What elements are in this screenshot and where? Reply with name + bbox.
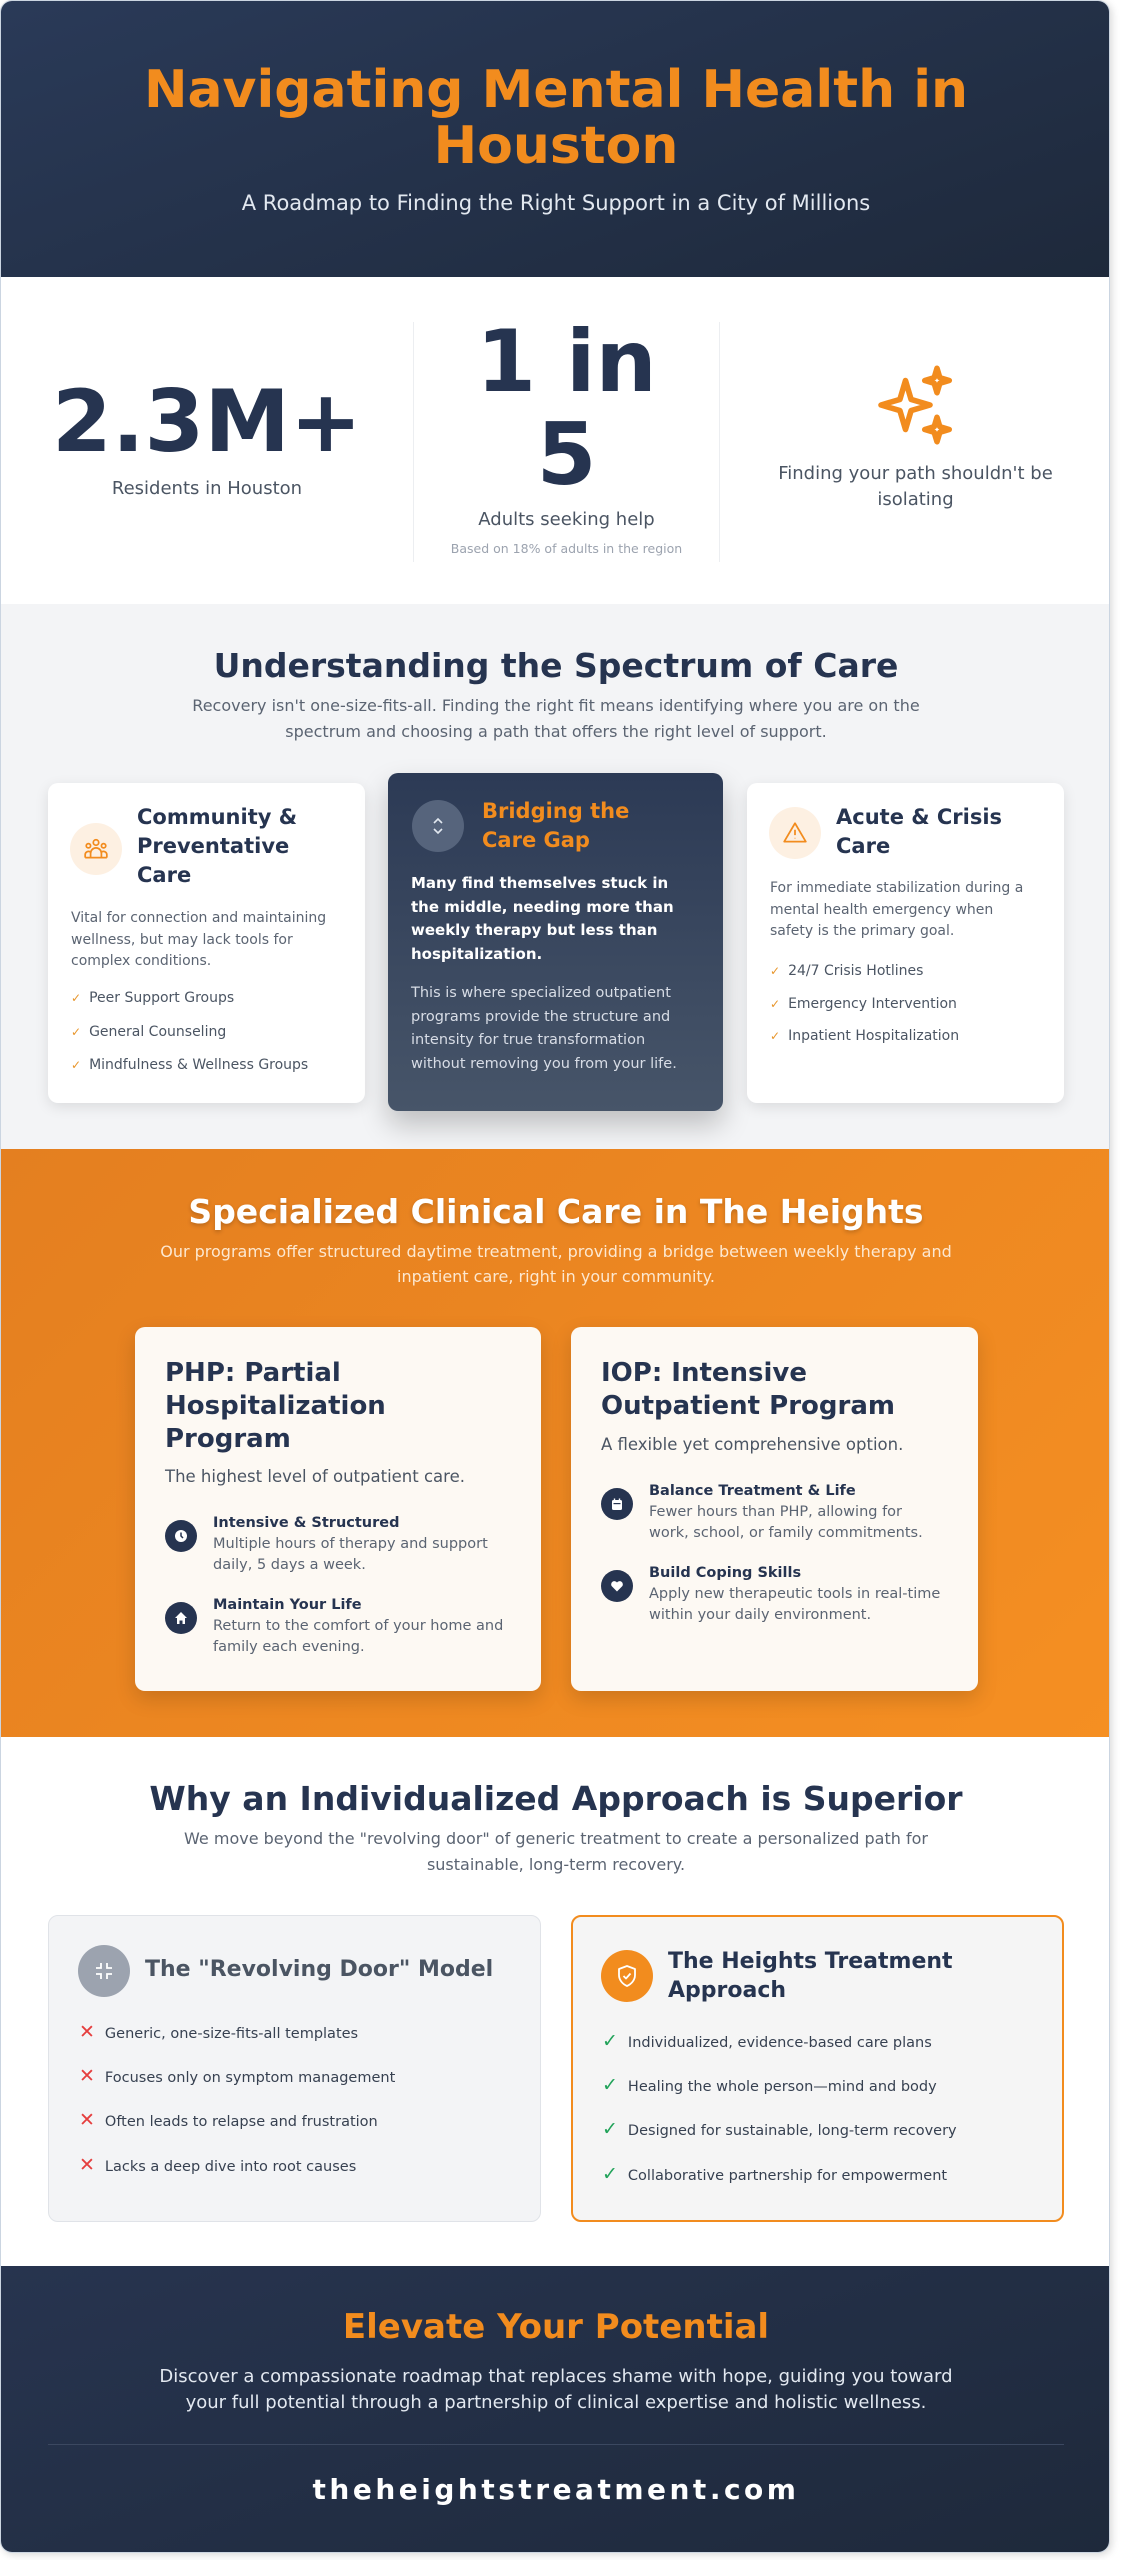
list: ✓ Designed for sustainable, long-term recovery — [602, 2118, 957, 2140]
footer — [1, 2266, 1111, 2556]
title: Preventative — [137, 834, 289, 858]
icon: people — [70, 823, 122, 875]
title: The "Revolving Door" Model — [145, 1957, 493, 1982]
title: Houston — [434, 116, 678, 176]
section: specialized clinical care — [1, 1149, 1111, 1737]
list: ✓ Inpatient Hospitalization — [770, 1028, 959, 1044]
title: Navigating Mental Health in — [144, 60, 968, 120]
list: ✓ Individualized, evidence-based care plans — [602, 2030, 932, 2052]
card: acute — [747, 783, 1064, 1103]
title: Care — [137, 863, 191, 887]
card: community — [48, 783, 365, 1103]
title — [165, 1358, 386, 1454]
title — [137, 805, 297, 887]
title — [668, 1949, 953, 2003]
stat: sparkle: isolating — [877, 489, 954, 510]
title: IOP: Intensive — [601, 1358, 807, 1388]
card: PHP — [135, 1327, 541, 1691]
icon: compress — [78, 1945, 130, 1997]
title: Hospitalization — [165, 1391, 386, 1421]
stat: 1 in 5: Based on 18% of adults in the region — [451, 541, 682, 556]
stat: 1 in 5: 5 — [537, 405, 596, 505]
item: maintain life — [165, 1597, 503, 1655]
description: Vital for connection and maintaining wellness, but may lack tools for complex conditions. — [71, 910, 326, 969]
item: intensive — [165, 1515, 488, 1573]
item: maintain life: Return to the comfort of your home and family each evening. — [213, 1618, 503, 1655]
stat: sparkle — [778, 366, 1053, 510]
title: PHP: Partial — [165, 1358, 341, 1388]
list: ✕ Focuses only on symptom management — [79, 2065, 395, 2087]
list: ✓ Healing the whole person—mind and body — [602, 2074, 937, 2096]
icon: heart — [601, 1570, 633, 1602]
title — [601, 1358, 895, 1421]
heading: Why an Individualized Approach is Superior — [149, 1779, 963, 1818]
subtitle: A flexible yet comprehensive option. — [601, 1435, 903, 1454]
intro — [184, 1829, 928, 1874]
intro — [160, 1242, 952, 1286]
stat: 1 in 5: 1 in — [476, 312, 657, 412]
title: Care Gap — [482, 828, 590, 852]
list: ✕ Often leads to relapse and frustration — [79, 2109, 378, 2131]
title — [482, 799, 629, 852]
heading: Understanding the Spectrum of Care — [214, 646, 898, 685]
subtitle: A Roadmap to Finding the Right Support in a City of Millions — [242, 191, 870, 215]
stat: residents: Residents in Houston — [112, 478, 302, 499]
item: balance: Balance Treatment & Life — [649, 1483, 856, 1499]
card: revolving door — [48, 1915, 541, 2222]
list — [79, 2021, 395, 2176]
title: The Heights Treatment — [668, 1949, 953, 1974]
list — [602, 2030, 957, 2185]
intro: Our programs offer structured daytime treatment, providing a bridge between weekly therapy and — [160, 1242, 952, 1261]
title: Care — [836, 834, 890, 858]
card: bridging the gap — [388, 773, 723, 1111]
item: intensive: Multiple hours of therapy and support daily, 5 days a week. — [213, 1536, 488, 1573]
title — [836, 805, 1002, 858]
footer text: your full potential through a partnership of clinical expertise and holistic wellness. — [186, 2392, 926, 2413]
header — [1, 1, 1111, 277]
intro: inpatient care, right in your community. — [397, 1267, 715, 1286]
title: Program — [165, 1424, 291, 1454]
icon: clock — [165, 1520, 197, 1552]
stat: residents: 2.3M+ — [52, 372, 362, 472]
list: ✓ Peer Support Groups — [71, 990, 234, 1006]
icon: shield — [601, 1950, 653, 2002]
body text: This is where specialized outpatient programs provide the structure and intensity for true transformation without removing you from your life. — [411, 985, 677, 1072]
subtitle: The highest level of outpatient care. — [165, 1467, 465, 1486]
footer text — [159, 2366, 953, 2413]
heading: Specialized Clinical Care in The Heights — [188, 1192, 924, 1231]
icon: sparkles — [878, 366, 952, 444]
list: ✓ General Counseling — [71, 1024, 226, 1040]
list: ✓ Collaborative partnership for empowerment — [602, 2163, 947, 2185]
stats panel — [1, 277, 1111, 604]
footer heading: Elevate Your Potential — [343, 2307, 769, 2347]
stat: 1 in 5 — [451, 312, 682, 556]
bold text: Many find themselves stuck in the middle, needing more than weekly therapy but less than hospitalization. — [411, 874, 674, 962]
intro: We move beyond the "revolving door" of generic treatment to create a personalized path for — [184, 1829, 928, 1848]
footer text: Discover a compassionate roadmap that replaces shame with hope, guiding you toward — [159, 2366, 953, 2387]
stat: 1 in 5: Adults seeking help — [478, 509, 655, 530]
list: ✓ 24/7 Crisis Hotlines — [770, 963, 923, 979]
intro: sustainable, long-term recovery. — [427, 1855, 685, 1874]
title: Community & — [137, 805, 297, 829]
list: ✕ Lacks a deep dive into root causes — [79, 2154, 356, 2176]
section: individualized approach — [1, 1737, 1111, 2266]
website url: theheightstreatment.com — [313, 2473, 799, 2506]
intro text: spectrum and choosing a path that offers the right level of support. — [285, 722, 827, 741]
item: balance: Fewer hours than PHP, allowing for work, school, or family commitments. — [649, 1504, 923, 1541]
icon: warning — [769, 807, 821, 859]
card: heights approach — [571, 1915, 1064, 2222]
icon: home — [165, 1602, 197, 1634]
title: Approach — [668, 1978, 786, 2003]
intro text: Recovery isn't one-size-fits-all. Finding the right fit means identifying where you are on the — [192, 696, 920, 715]
stat: sparkle: Finding your path shouldn't be — [778, 463, 1053, 484]
title — [144, 60, 968, 176]
item: coping: Build Coping Skills — [649, 1565, 801, 1581]
list: ✓ Mindfulness & Wellness Groups — [71, 1057, 308, 1073]
description: For immediate stabilization during a mental health emergency when safety is the primary goal. — [770, 880, 1023, 939]
list: ✕ Generic, one-size-fits-all templates — [79, 2021, 358, 2043]
title: Acute & Crisis — [836, 805, 1002, 829]
icon: calendar — [601, 1488, 633, 1520]
list — [770, 963, 959, 1044]
item: coping: Apply new therapeutic tools in real-time within your daily environment. — [649, 1586, 940, 1623]
intro text — [192, 696, 920, 741]
icon: chevrons — [412, 800, 464, 852]
item: balance — [601, 1483, 923, 1541]
section: spectrum of care — [1, 604, 1111, 1149]
item: maintain life: Maintain Your Life — [213, 1597, 362, 1613]
item: coping — [601, 1565, 940, 1623]
title: Outpatient Program — [601, 1391, 895, 1421]
list — [71, 990, 308, 1073]
card: IOP — [571, 1327, 978, 1691]
list: ✓ Emergency Intervention — [770, 996, 957, 1012]
title: Bridging the — [482, 799, 629, 823]
item: intensive: Intensive & Structured — [213, 1515, 400, 1531]
